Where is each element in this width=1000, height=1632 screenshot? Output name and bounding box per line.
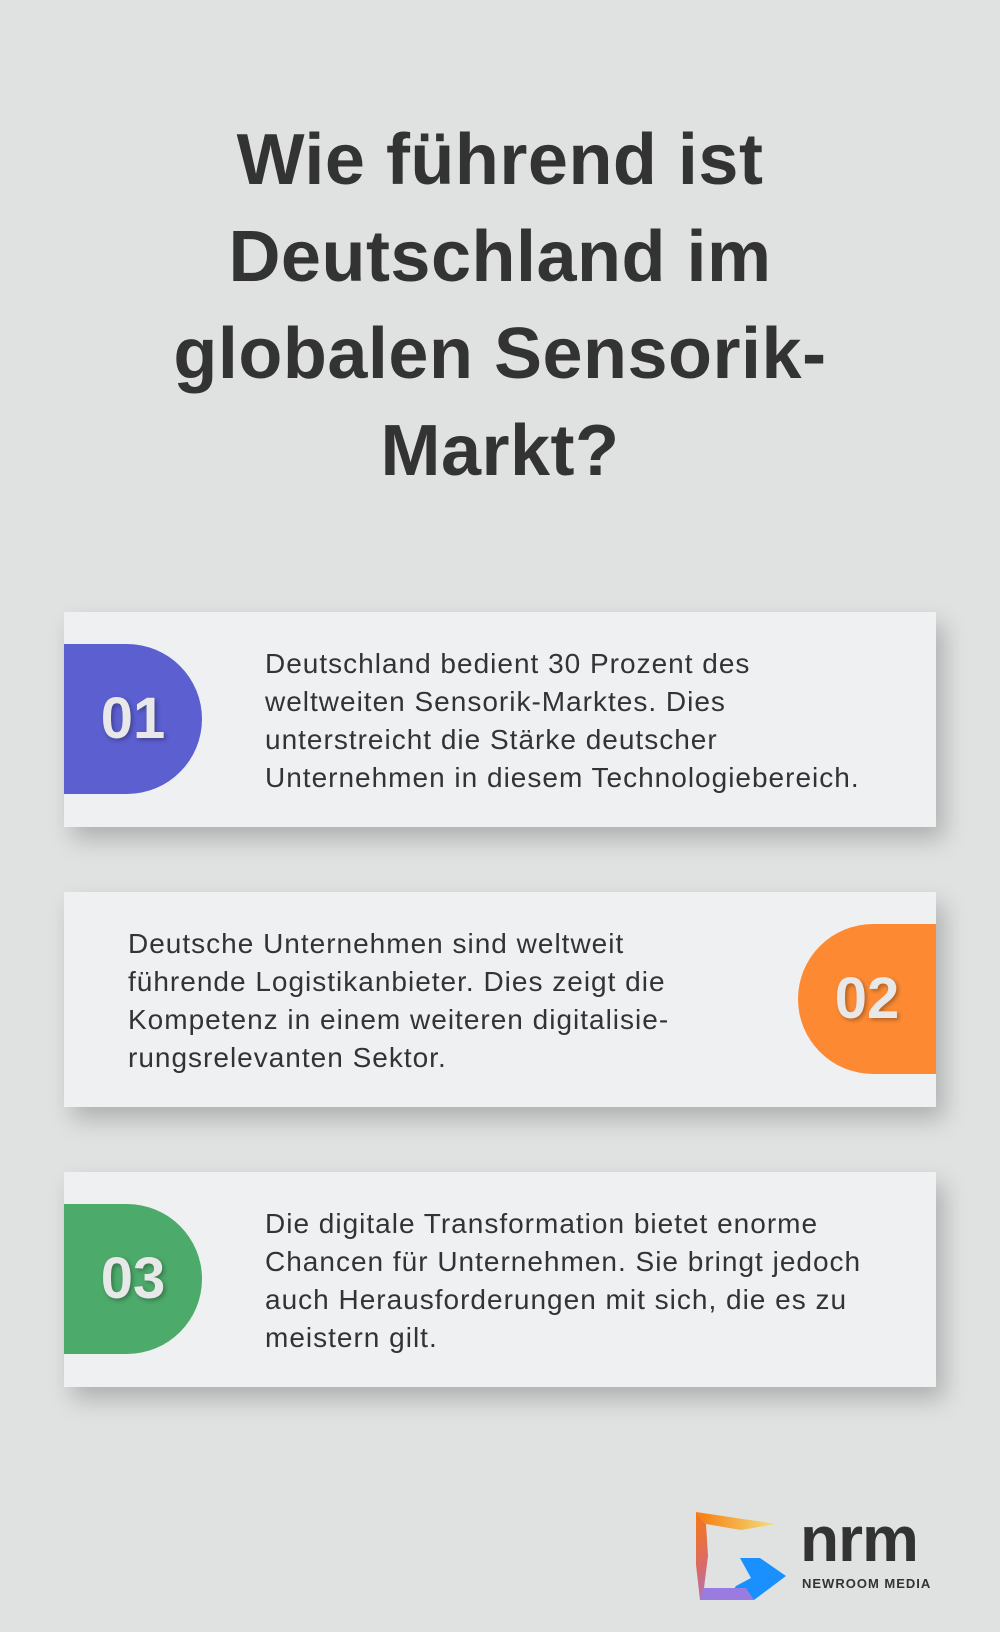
icon: logo mark <box>696 1512 786 1600</box>
logo text: nrm <box>800 1503 918 1575</box>
logo: NEWROOM MEDIA <box>802 1576 931 1591</box>
text 01: weltweiten Sensorik-Marktes. Dies <box>265 686 726 717</box>
badge 03 <box>64 1204 202 1354</box>
text 02: Kompetenz in einem weiteren digitalisie- <box>128 1004 669 1035</box>
title: Wie führend ist <box>237 120 763 200</box>
logo <box>696 1503 931 1600</box>
badge 03: 03 <box>101 1246 165 1311</box>
text 02: Deutsche Unternehmen sind weltweit <box>128 928 624 959</box>
panel: card 01 <box>64 612 936 827</box>
text 01: Deutschland bedient 30 Prozent des <box>265 648 750 679</box>
text 01: unterstreicht die Stärke deutscher <box>265 724 718 755</box>
text 03: meistern gilt. <box>265 1322 438 1353</box>
title: Deutschland im <box>228 217 772 297</box>
title: Markt? <box>380 411 620 491</box>
panel: card 02 <box>64 892 936 1107</box>
text 03: Chancen für Unternehmen. Sie bringt jedoch <box>265 1246 861 1277</box>
title: globalen Sensorik- <box>173 314 827 394</box>
badge 01: 01 <box>101 686 165 751</box>
text 02: rungsrelevanten Sektor. <box>128 1042 447 1073</box>
text 03: Die digitale Transformation bietet enorme <box>265 1208 818 1239</box>
text 01 <box>265 648 860 793</box>
badge 01 <box>64 644 202 794</box>
text 03: auch Herausforderungen mit sich, die es zu <box>265 1284 847 1315</box>
title <box>173 120 827 491</box>
badge 02 <box>798 924 936 1074</box>
badge 02: 02 <box>835 966 899 1031</box>
text 02: führende Logistikanbieter. Dies zeigt die <box>128 966 666 997</box>
text 03 <box>265 1208 861 1353</box>
text 02 <box>128 928 669 1073</box>
text 01: Unternehmen in diesem Technologiebereich. <box>265 762 860 793</box>
panel: card 03 <box>64 1172 936 1387</box>
